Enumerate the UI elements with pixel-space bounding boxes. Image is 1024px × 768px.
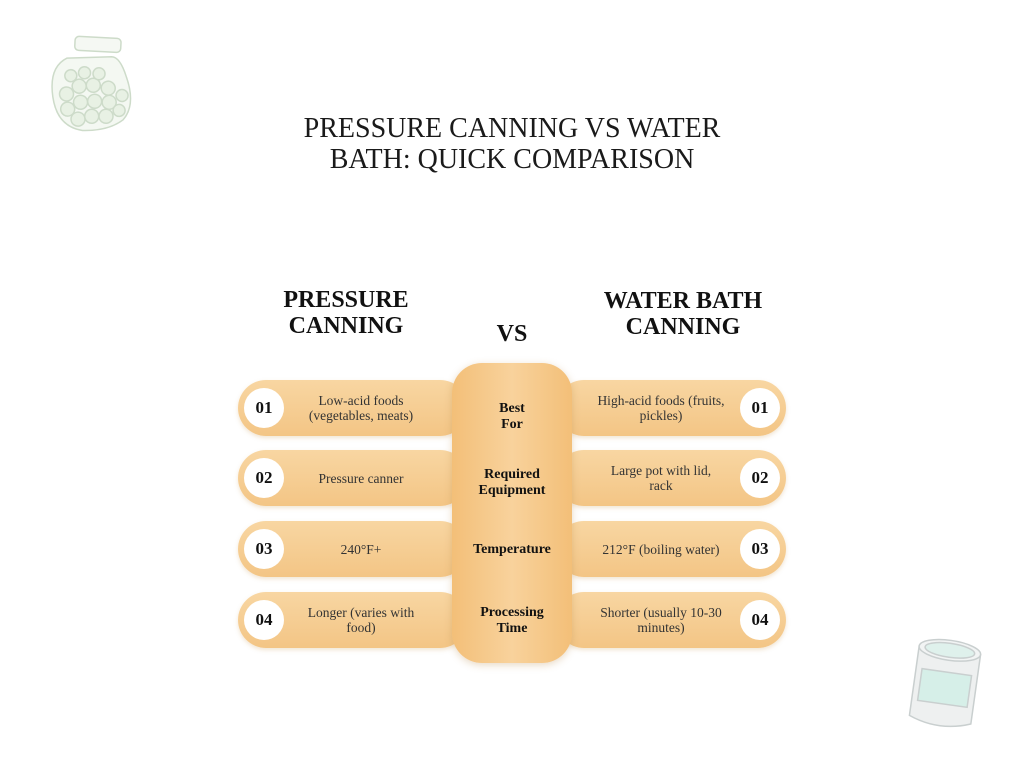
left row 1: [238, 380, 468, 436]
left row 4: food): [346, 620, 376, 635]
right row 3: 03: [752, 539, 768, 558]
right row 3: [556, 521, 786, 577]
right row 2: Large pot with lid,: [611, 463, 711, 478]
label: best for: [499, 401, 525, 432]
right row 1: [556, 380, 786, 436]
right row 3: 212°F (boiling water): [602, 542, 720, 556]
heading: water bath canning: [604, 288, 762, 340]
left row 4: [238, 592, 468, 648]
label: best for: For: [501, 417, 523, 432]
heading: pressure canning: [283, 287, 409, 339]
left row 3: 240°F+: [341, 542, 381, 556]
heading: water bath canning: CANNING: [626, 314, 740, 340]
label: processing time: Processing: [480, 605, 544, 620]
left row 1: Low-acid foods: [318, 393, 404, 408]
right row 4: minutes): [637, 620, 685, 635]
heading: pressure canning: CANNING: [289, 313, 403, 339]
left row 2: 02: [256, 468, 272, 487]
heading: pressure canning: PRESSURE: [283, 287, 409, 313]
heading: vs: VS: [497, 321, 527, 347]
left row 2: Pressure canner: [318, 470, 404, 486]
left row 4: 04: [256, 610, 272, 629]
left column pills: [236, 380, 456, 652]
left row 4: Longer (varies with: [308, 605, 414, 620]
right column pills: [568, 380, 788, 652]
label: processing time: Time: [497, 621, 527, 636]
icon: jar of marbles: [51, 36, 132, 132]
right row 2: rack: [649, 478, 673, 493]
left row 2: [238, 450, 468, 506]
left row 1: 01: [256, 398, 272, 417]
right row 2: [556, 450, 786, 506]
center column: criteria: [452, 363, 572, 663]
right row 4: [556, 592, 786, 648]
right row 1: High-acid foods (fruits,: [597, 393, 725, 408]
left row 3: [238, 521, 468, 577]
right row 2: 02: [752, 468, 768, 487]
label: required equipment: [478, 467, 546, 498]
title: PRESSURE CANNING VS WATER: [304, 113, 720, 144]
right row 1: 01: [752, 398, 768, 417]
title: [304, 113, 720, 175]
left row 1: (vegetables, meats): [309, 408, 413, 423]
label: processing time: [480, 605, 544, 636]
right row 1: pickles): [640, 408, 682, 423]
right row 4: 04: [752, 610, 768, 629]
heading: water bath canning: WATER BATH: [604, 288, 762, 314]
label: best for: Best: [499, 401, 525, 416]
label: required equipment: Equipment: [479, 483, 545, 498]
right row 4: Shorter (usually 10-30: [600, 605, 722, 620]
label: required equipment: Required: [484, 467, 540, 482]
title: BATH: QUICK COMPARISON: [330, 144, 694, 175]
label: temperature: Temperature: [473, 542, 551, 557]
left row 3: 03: [256, 539, 272, 558]
icon: tin can: [908, 638, 982, 728]
